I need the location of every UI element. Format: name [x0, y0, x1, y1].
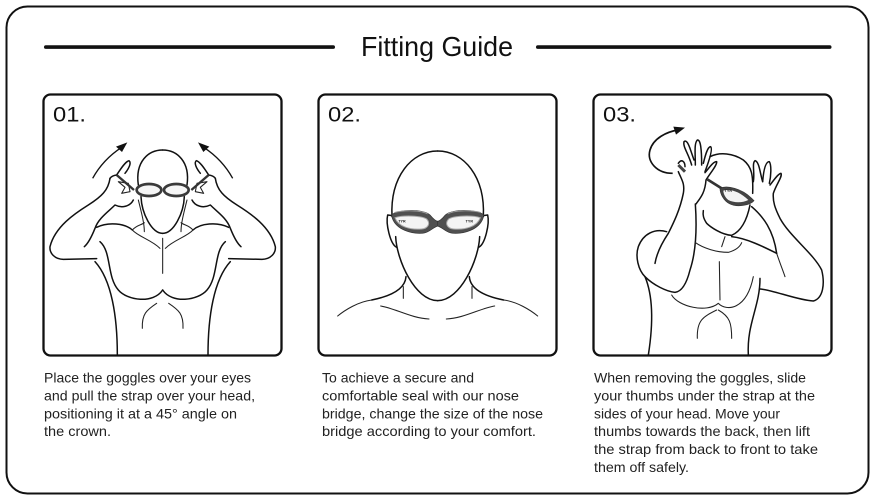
goggles: TYR: [725, 189, 732, 193]
panel: step 3: [594, 94, 832, 356]
text: step 1: and pull the strap over your head,: [44, 388, 255, 404]
illustration: man pulling strap over head: [50, 142, 275, 355]
text: step 2: bridge, change the size of the nose: [322, 405, 543, 421]
right half of figure: [163, 142, 275, 355]
right half of head and shoulders: [437, 151, 538, 319]
chest centre line: [161, 238, 164, 273]
left half of head and shoulders: [338, 151, 438, 319]
left half of figure: [50, 142, 163, 355]
step number 03: 03.: [603, 104, 636, 126]
title: Fitting Guide: [361, 31, 513, 62]
raised right hand and arm: [752, 161, 823, 301]
raised left hand and arm: [637, 140, 717, 292]
goggle logos: TYR: [398, 219, 406, 223]
curved arrow: [649, 127, 685, 173]
text: step 2: [322, 370, 543, 439]
illustration: front view of head with goggles: [338, 151, 538, 319]
text: step 2: bridge according to your comfort.: [322, 423, 536, 439]
illustration: man removing goggles: [637, 127, 823, 355]
step number 01: 01.: [53, 104, 86, 126]
text: step 2: To achieve a secure and: [322, 370, 474, 386]
text: step 1: Place the goggles over your eyes: [44, 370, 251, 386]
goggles: [707, 179, 754, 206]
text: step 3: your thumbs under the strap at the: [594, 388, 815, 404]
text: step 2: comfortable seal with our nose: [322, 388, 519, 404]
text: step 3: When removing the goggles, slide: [594, 370, 806, 386]
text: step 3: sides of your head. Move your: [594, 405, 780, 421]
frame 3: [594, 94, 832, 356]
text: step 3: thumbs towards the back, then lift: [594, 423, 810, 439]
text: step 3: them off safely.: [594, 459, 689, 475]
frame 1: [44, 94, 282, 356]
step number 02: 02.: [328, 104, 361, 126]
panel: step 1: [44, 94, 282, 356]
panel: step 2: [318, 94, 556, 356]
text: step 1: positioning it at a 45° angle on: [44, 405, 237, 421]
goggles: [137, 184, 189, 196]
text: step 1: [44, 370, 255, 439]
head: [703, 154, 753, 235]
text: step 1: the crown.: [44, 423, 111, 439]
torso: [645, 237, 777, 355]
title with rules: [44, 31, 832, 62]
frame 2: [318, 94, 556, 356]
text: step 3: [594, 370, 818, 475]
goggle logos: [398, 219, 473, 223]
text: step 3: the strap from back to front to take: [594, 441, 818, 457]
goggle logos: TYR: [466, 219, 473, 223]
